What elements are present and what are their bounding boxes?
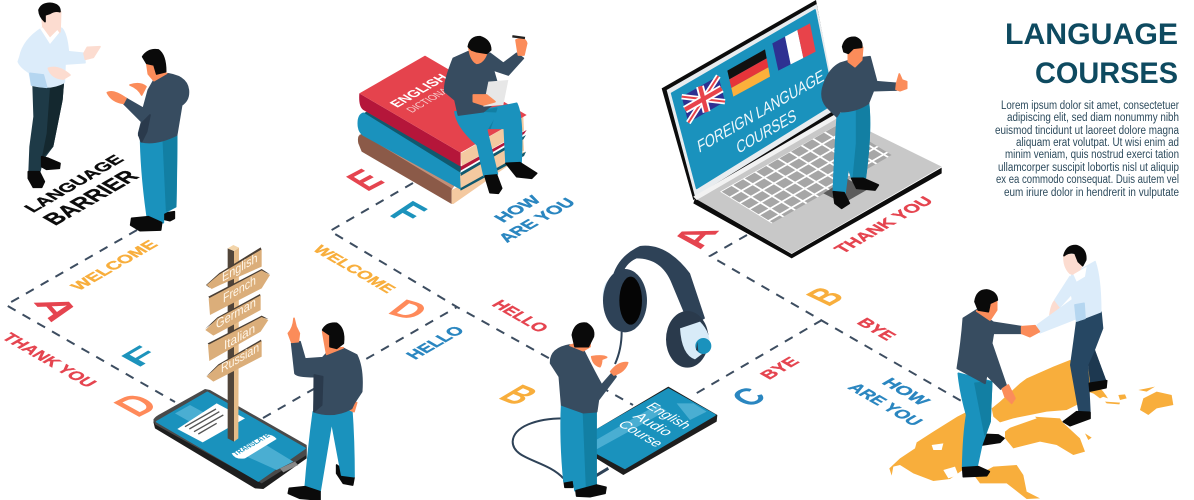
pill text: TRANSLATE: TRANSLATE: [231, 432, 272, 457]
floor label: E: E: [337, 163, 393, 197]
floor label: centre D: D: [380, 294, 437, 326]
floor label: left WELCOME: WELCOME: [68, 238, 162, 293]
scene: stacked dictionaries with reading man: [358, 56, 527, 204]
title: LANGUAGE COURSES: LANGUAGE: [1005, 18, 1178, 51]
body text block: [995, 100, 1180, 199]
floor heading: LANGUAGE BARRIER: BARRIER: [37, 166, 145, 229]
man pointing at signpost: [288, 318, 362, 500]
phone: [593, 387, 717, 475]
screen text: FOREIGN LANGUAGE COURSES: FOREIGN LANGUAGE: [696, 66, 825, 157]
laptop body: [662, 0, 942, 258]
floor label: right BYE: BYE: [853, 315, 900, 343]
floor label: F near books: F: [381, 195, 437, 230]
floor label: C: C: [722, 382, 775, 412]
scene: audio course with headphones: [513, 246, 717, 497]
phone: [153, 389, 307, 489]
floor label: laptop THANK YOU: THANK YOU: [830, 194, 937, 256]
floor label: blue HELLO: HELLO: [402, 323, 469, 362]
man sitting on books: [445, 36, 537, 193]
scene: translate phone with signpost: [153, 389, 307, 489]
phone text: English Audio Course: [614, 400, 695, 450]
man in light shirt: [1037, 246, 1107, 426]
sign labels: English, French, German, Italian, Russian: [216, 249, 259, 376]
scene: world map handshake: [889, 246, 1173, 499]
floor label: left A: A: [24, 291, 89, 326]
floor label: left D: D: [104, 388, 169, 423]
floor label: right HOW ARE YOU: HOW: [878, 375, 935, 409]
floor label: centre WELCOME: WELCOME: [309, 243, 399, 296]
floor label: left F: F: [113, 341, 166, 371]
title: LANGUAGE COURSES: [1005, 18, 1178, 90]
man in dark sweater: [957, 290, 1039, 477]
floor label: right HOW ARE YOU: ARE YOU: [844, 380, 927, 429]
scene: laptop with foreign language courses: [662, 0, 942, 258]
man standing on laptop with thumbs up: [822, 37, 907, 208]
man listening: [551, 323, 628, 497]
man in light shirt: [18, 3, 100, 187]
world map: [889, 360, 1173, 499]
floor label: centre B: B: [489, 379, 548, 411]
flag: UK: [682, 76, 725, 123]
floor label: lower BYE: BYE: [756, 354, 804, 382]
sign labels: English, French, German, Italian, Russian: French: [223, 272, 256, 306]
floor label: right B: B: [797, 282, 854, 311]
book title: ENGLISH: ENGLISH: [386, 71, 452, 110]
flag: France: [772, 23, 816, 71]
floor label: red HELLO: HELLO: [488, 297, 552, 335]
dashed connector paths: [6, 183, 963, 418]
man in dark sweater, back view: [107, 50, 188, 231]
screen text: FOREIGN LANGUAGE COURSES: COURSES: [735, 105, 798, 158]
sign labels: English, French, German, Italian, Russian: Russian: [221, 339, 259, 376]
headphones: [603, 246, 711, 368]
sign labels: English, French, German, Italian, Russian: German: [216, 294, 256, 332]
flag: Germany: [727, 49, 770, 97]
floor heading: LANGUAGE BARRIER: LANGUAGE: [20, 152, 128, 215]
book stack: [358, 56, 527, 204]
floor label: left THANK YOU: THANK YOU: [0, 330, 101, 390]
floor label: laptop A: A: [660, 222, 729, 252]
floor label: HOW ARE YOU near books: HOW: [490, 192, 546, 225]
floor label: HOW ARE YOU near books: ARE YOU: [494, 195, 580, 245]
phone text: English Audio Course: English: [642, 400, 695, 432]
sign labels: English, French, German, Italian, Russian: Italian: [224, 320, 255, 353]
scene: language barrier two men: [18, 3, 188, 231]
phone text: English Audio Course: Audio: [629, 410, 677, 439]
title: LANGUAGE COURSES: COURSES: [1035, 57, 1178, 90]
screen text: FOREIGN LANGUAGE COURSES: [696, 66, 825, 158]
phone text: English Audio Course: Course: [614, 418, 667, 450]
book title: DICTIONARY: DICTIONARY: [404, 80, 464, 115]
sign labels: English, French, German, Italian, Russian: English: [222, 249, 258, 285]
signpost: [205, 245, 270, 442]
audio cable: [513, 332, 622, 478]
